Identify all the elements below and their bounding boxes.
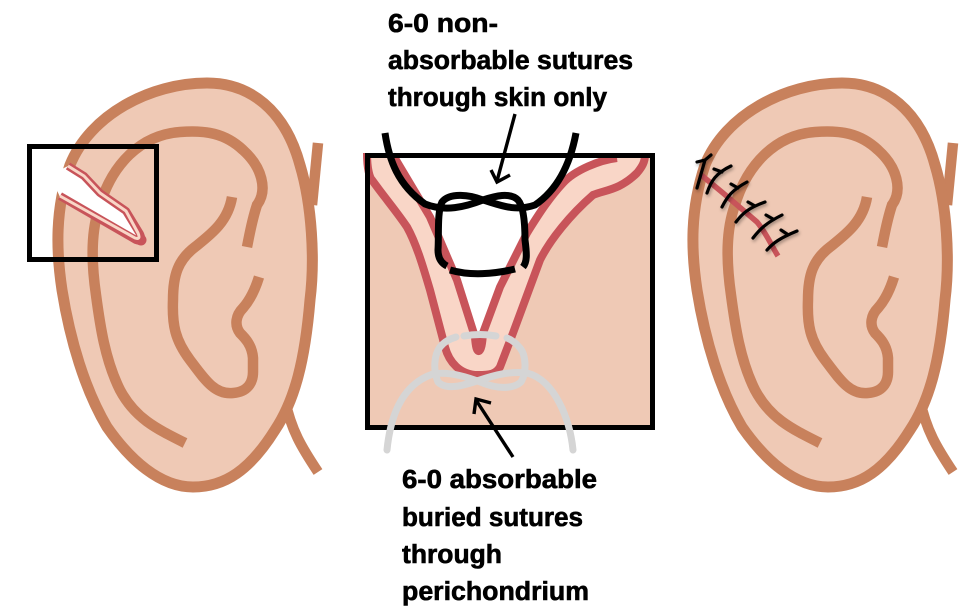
panel: right ear after repair bbox=[693, 83, 953, 487]
panel: left ear with laceration bbox=[30, 83, 318, 487]
ear outline bbox=[693, 83, 947, 487]
stitch 5 bbox=[753, 215, 782, 238]
label: absorbable buried sutures bbox=[402, 466, 597, 606]
arrow: to absorbable sutures bbox=[474, 399, 513, 457]
arrow shaft bbox=[497, 114, 515, 181]
ear tail top bbox=[312, 143, 318, 205]
suture bottom tie bbox=[450, 269, 515, 274]
antihelix line bbox=[808, 197, 894, 393]
buried strand from right bbox=[435, 337, 573, 450]
stitch 3 bbox=[722, 182, 747, 207]
wound edge red bbox=[60, 166, 141, 241]
stitch 2 bbox=[707, 166, 731, 193]
closeup frame bbox=[368, 156, 652, 428]
grey buried suture bbox=[387, 334, 573, 450]
label line 2: buried sutures bbox=[402, 504, 583, 532]
laceration wound edges bbox=[60, 166, 146, 246]
buried strand from left bbox=[387, 338, 525, 450]
ear tail top bbox=[947, 143, 953, 205]
label line 4: perichondrium bbox=[402, 578, 589, 606]
arrow: to non-absorbable sutures bbox=[491, 114, 515, 182]
black skin suture bbox=[385, 133, 576, 274]
panel: closeup of suture layers bbox=[367, 133, 652, 450]
label line 2: absorbable sutures bbox=[388, 47, 633, 75]
buried top tie bbox=[464, 334, 496, 336]
arrow head bbox=[491, 170, 510, 182]
antihelix line bbox=[173, 197, 259, 393]
label line 1: 6-0 non- bbox=[388, 10, 498, 38]
repaired ear shape bbox=[693, 83, 953, 487]
repaired wound line bbox=[700, 174, 778, 256]
helix line bbox=[93, 131, 262, 443]
perichondrium inner red line bbox=[393, 155, 617, 351]
stitch 6 bbox=[767, 230, 797, 250]
ear tail bottom bbox=[920, 400, 953, 472]
wound edge pale bbox=[60, 166, 139, 238]
perichondrium outer red line bbox=[367, 153, 645, 375]
ear tail bottom bbox=[285, 400, 318, 472]
laceration wedge bbox=[50, 166, 140, 238]
inset box bbox=[30, 146, 156, 260]
cartilage pale band bbox=[367, 155, 645, 375]
suture strand from left bbox=[385, 133, 526, 267]
label: non-absorbable sutures bbox=[388, 10, 633, 112]
suture strand from right bbox=[438, 133, 576, 266]
helix line bbox=[728, 131, 897, 443]
tip of wound bbox=[472, 341, 484, 353]
skin stitches bbox=[697, 155, 797, 250]
closeup skin background bbox=[368, 156, 652, 428]
arrow head bbox=[474, 399, 491, 414]
ear outline bbox=[58, 83, 312, 487]
label line 3: through bbox=[402, 541, 502, 569]
arrow shaft bbox=[476, 400, 513, 457]
label line 1: 6-0 absorbable bbox=[402, 466, 597, 494]
wound tip bbox=[136, 234, 146, 246]
wound gap white bbox=[395, 155, 617, 352]
stitch 4 bbox=[736, 202, 765, 222]
label line 3: through skin only bbox=[388, 84, 608, 112]
stitch 1 bbox=[697, 155, 711, 188]
